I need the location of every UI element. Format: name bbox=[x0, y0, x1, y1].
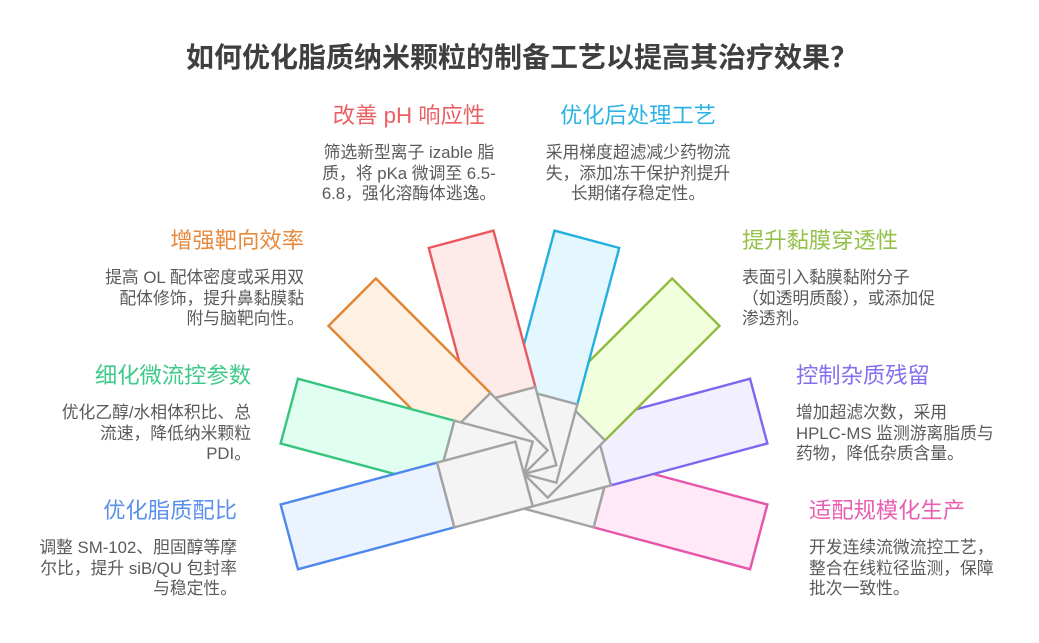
text block: pH response: 6.8，强化溶酶体逃逸。 bbox=[322, 184, 496, 203]
text block: post-processing: 长期储存稳定性。 bbox=[571, 184, 705, 203]
text block: mucosal penetration: 渗透剂。 bbox=[742, 309, 809, 328]
text block: impurity control: HPLC-MS 监测游离脂质与 bbox=[796, 424, 994, 443]
text block: microfluidic parameters: 细化微流控参数 bbox=[95, 363, 251, 388]
text block: pH response: 质，将 pKa 微调至 6.5- bbox=[322, 164, 496, 183]
text block: targeting efficiency: 提高 OL 配体密度或采用双 bbox=[105, 268, 304, 287]
text block: targeting efficiency: 附与脑靶向性。 bbox=[187, 309, 304, 328]
text block: pH response: 改善 pH 响应性 bbox=[333, 103, 485, 128]
text block: post-processing bbox=[546, 103, 730, 203]
text block: scale-up production: 批次一致性。 bbox=[809, 579, 910, 598]
blade: lime bbox=[500, 278, 720, 498]
text block: mucosal penetration: 提升黏膜穿透性 bbox=[742, 228, 898, 253]
text block: scale-up production bbox=[809, 498, 994, 598]
text block: microfluidic parameters: 优化乙醇/水相体积比、总 bbox=[62, 403, 251, 422]
text block: targeting efficiency bbox=[105, 228, 304, 328]
text block: post-processing: 采用梯度超滤减少药物流 bbox=[546, 143, 730, 162]
text block: pH response: 筛选新型离子 izable 脂 bbox=[324, 143, 494, 162]
blade: orange bbox=[328, 278, 548, 498]
text block: targeting efficiency: 配体修饰，提升鼻黏膜黏 bbox=[119, 289, 304, 308]
text block: microfluidic parameters: 流速，降低纳米颗粒 bbox=[100, 424, 251, 443]
text block: mucosal penetration: （如透明质酸），或添加促 bbox=[742, 289, 935, 308]
text block: scale-up production: 开发连续流微流控工艺， bbox=[809, 538, 994, 557]
text block: post-processing: 失，添加冻干保护剂提升 bbox=[546, 164, 730, 183]
blade: pink bbox=[515, 442, 767, 569]
text block: lipid ratio: 尔比，提升 siB/QU 包封率 bbox=[40, 559, 237, 578]
text block: impurity control: 药物，降低杂质含量。 bbox=[796, 444, 964, 463]
title: 如何优化脂质纳米颗粒的制备工艺以提高其治疗效果？ bbox=[186, 42, 858, 73]
blade: green bbox=[281, 379, 533, 506]
blade: blue bbox=[281, 442, 533, 569]
text block: mucosal penetration: 表面引入黏膜黏附分子 bbox=[742, 268, 910, 287]
text block: microfluidic parameters: PDI。 bbox=[206, 444, 251, 463]
text block: pH response bbox=[322, 103, 496, 203]
blade: purple bbox=[515, 379, 767, 506]
text block: lipid ratio: 与稳定性。 bbox=[153, 579, 237, 598]
text block: lipid ratio: 调整 SM-102、胆固醇等摩 bbox=[39, 538, 237, 557]
text block: impurity control bbox=[796, 363, 994, 463]
text block: post-processing: 优化后处理工艺 bbox=[560, 103, 716, 128]
text block: impurity control: 增加超滤次数，采用 bbox=[796, 403, 947, 422]
text block: lipid ratio: 优化脂质配比 bbox=[103, 498, 237, 523]
text block: lipid ratio bbox=[39, 498, 237, 598]
text block: impurity control: 控制杂质残留 bbox=[796, 363, 930, 388]
text block: microfluidic parameters bbox=[62, 363, 251, 463]
text block: mucosal penetration bbox=[742, 228, 935, 328]
text block: targeting efficiency: 增强靶向效率 bbox=[170, 228, 304, 253]
blade: sky bbox=[492, 231, 619, 483]
text block: scale-up production: 适配规模化生产 bbox=[809, 498, 965, 523]
text block: scale-up production: 整合在线粒径监测，保障 bbox=[809, 559, 994, 578]
blade: red bbox=[429, 231, 556, 483]
